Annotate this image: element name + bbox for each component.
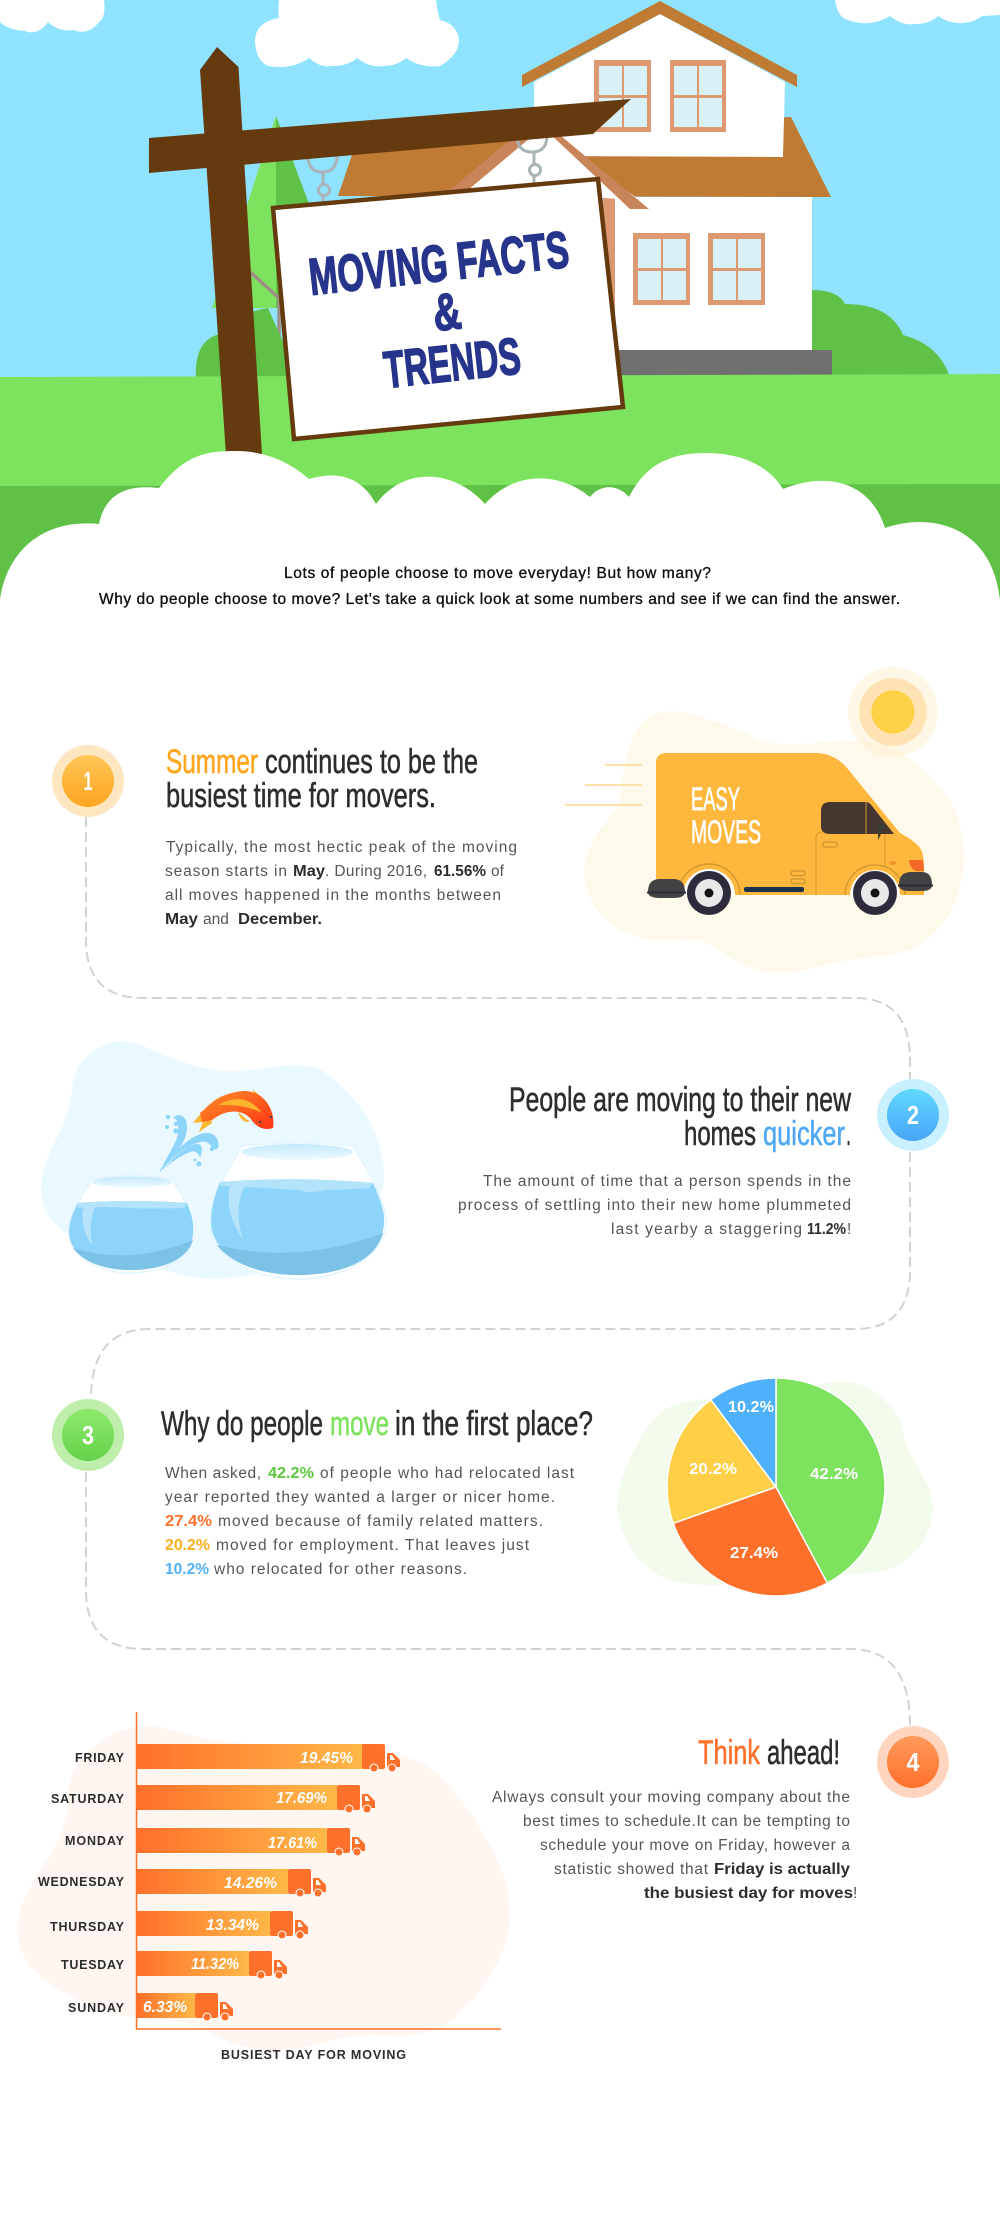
illustration: blob xyxy=(41,1041,384,1279)
chart blob xyxy=(17,1726,510,2051)
hook: left chain xyxy=(308,155,337,204)
gable beams xyxy=(450,132,649,209)
number badge 4 xyxy=(877,1726,949,1798)
cloud: top right xyxy=(835,0,1000,24)
chart caption: BUSIEST DAY FOR MOVING xyxy=(221,2048,406,2062)
van label: EASY xyxy=(691,781,740,817)
intro text xyxy=(99,565,900,608)
body text 2: ! xyxy=(847,1221,851,1238)
body text 1: all moves happened in the months between xyxy=(165,887,501,904)
number badge 4: 4 xyxy=(906,1747,920,1777)
bar: monday xyxy=(65,1828,365,1856)
pie labels: 42.2% xyxy=(810,1466,858,1483)
heading 3: Why do people xyxy=(161,1405,323,1443)
heading 2: . xyxy=(846,1115,851,1153)
foundation xyxy=(600,350,832,376)
bar: thursday: THURSDAY xyxy=(50,1920,125,1934)
heading 1 xyxy=(166,743,478,815)
heading 3 xyxy=(161,1405,593,1443)
title: MOVING FACTS xyxy=(306,221,572,307)
body text 4: statistic showed that xyxy=(554,1861,709,1878)
dashed connector xyxy=(86,817,910,1725)
bar: tuesday: TUESDAY xyxy=(61,1958,125,1972)
bar: saturday: 17.69% xyxy=(276,1790,327,1807)
bar: sunday xyxy=(68,1993,233,2021)
bar: sunday: SUNDAY xyxy=(68,2001,125,2015)
porch column xyxy=(603,192,615,352)
lawn xyxy=(0,374,1000,640)
title: TRENDS xyxy=(381,327,523,400)
dark lawn xyxy=(0,484,1000,640)
axes xyxy=(136,1712,501,2029)
bar: sunday: 6.33% xyxy=(143,1999,187,2016)
body text 3 xyxy=(165,1465,575,1578)
window: upper left xyxy=(594,60,651,132)
body text 4: ! xyxy=(853,1885,857,1902)
pie labels: 27.4% xyxy=(730,1545,778,1562)
heading 2: People are moving to their new xyxy=(509,1081,851,1119)
bar: tuesday xyxy=(61,1951,287,1979)
pie labels: 10.2% xyxy=(728,1399,774,1416)
bar: wednesday xyxy=(38,1869,326,1897)
window: upper right xyxy=(670,60,726,132)
body text 4: best times to schedule.It can be tempting to xyxy=(523,1813,850,1830)
number badge 2 xyxy=(877,1079,949,1151)
body text 1: and xyxy=(203,911,229,928)
body text 3: moved for employment. That leaves just xyxy=(216,1537,530,1554)
body text 2 xyxy=(458,1173,851,1238)
bar: thursday: 13.34% xyxy=(206,1917,259,1934)
heading 2: quicker xyxy=(763,1115,845,1153)
front bumper xyxy=(898,872,933,891)
body text 3: year reported they wanted a larger or nicer home. xyxy=(165,1489,555,1506)
bar: thursday xyxy=(50,1911,308,1939)
body text 4 xyxy=(492,1789,857,1902)
window: lower left xyxy=(633,233,690,305)
speed lines xyxy=(565,765,642,805)
heading 1: continues to be the xyxy=(265,743,478,781)
intro text: Lots of people choose to move everyday! But how many? xyxy=(284,565,711,582)
sign post xyxy=(200,47,262,480)
bar: monday: MONDAY xyxy=(65,1834,125,1848)
pie labels xyxy=(689,1399,858,1562)
number badge 3: 3 xyxy=(82,1420,94,1450)
body text 1: 61.56% xyxy=(434,863,486,880)
van label xyxy=(691,781,761,850)
van label: MOVES xyxy=(691,814,761,850)
title sign board xyxy=(273,179,623,439)
bar: friday: 19.45% xyxy=(300,1750,353,1767)
section 1 xyxy=(52,667,964,973)
body text 1: May xyxy=(165,911,198,928)
gable xyxy=(450,128,640,200)
body text 1: May xyxy=(293,863,325,880)
heading 4: ahead! xyxy=(767,1734,840,1772)
wheels xyxy=(687,871,897,915)
section 3 xyxy=(52,1378,933,1596)
heading 1: busiest time for movers. xyxy=(166,777,436,815)
body text 1: of xyxy=(491,863,505,880)
body text 4: Friday is actually xyxy=(714,1861,850,1878)
large fishbowl xyxy=(210,1143,386,1279)
heading 2: homes xyxy=(684,1115,756,1153)
hero illustration xyxy=(0,0,1000,640)
bar: saturday: SATURDAY xyxy=(51,1792,125,1806)
bar chart xyxy=(38,1712,501,2029)
heading 2 xyxy=(509,1081,851,1153)
tree xyxy=(212,116,330,375)
body text 1: season starts in xyxy=(165,863,287,880)
body text 2: 11.2% xyxy=(807,1221,846,1238)
body text 4: Always consult your moving company about the xyxy=(492,1789,850,1806)
heading 1: Summer xyxy=(166,743,258,781)
bushes xyxy=(196,290,950,380)
bar: wednesday: WEDNESDAY xyxy=(38,1875,125,1889)
bar: wednesday: 14.26% xyxy=(224,1875,277,1892)
cloud: top middle xyxy=(255,0,459,67)
number badge 1 xyxy=(52,745,124,817)
body text 3: moved because of family related matters. xyxy=(218,1513,543,1530)
heading 3: move xyxy=(330,1405,389,1443)
body text 1: . During 2016, xyxy=(325,863,427,880)
small fishbowl xyxy=(69,1176,193,1273)
body text 3: 20.2% xyxy=(165,1537,210,1554)
bar: monday: 17.61% xyxy=(268,1835,317,1852)
goldfish xyxy=(193,1089,273,1132)
body text 1 xyxy=(165,839,517,928)
body text 4: the busiest day for moves xyxy=(644,1885,853,1902)
body text 2: last yearby a staggering xyxy=(611,1221,802,1238)
heading 3: in the first place? xyxy=(395,1405,593,1443)
body text 3: 10.2% xyxy=(165,1561,209,1578)
body text 1: Typically, the most hectic peak of the moving xyxy=(166,839,517,856)
number badge 1: 1 xyxy=(84,766,92,796)
title: & xyxy=(430,282,464,343)
window: lower right xyxy=(708,233,765,305)
pie chart xyxy=(667,1378,885,1596)
pie labels: 20.2% xyxy=(689,1461,737,1478)
lower wall xyxy=(610,197,812,350)
intro text: Why do people choose to move? Let's take a quick look at some numbers and see if we can find the answer. xyxy=(99,591,900,608)
water splash xyxy=(159,1115,218,1173)
icon: sun xyxy=(848,667,938,757)
bar: tuesday: 11.32% xyxy=(191,1956,239,1973)
illustration: blob xyxy=(584,711,964,973)
rear bumper xyxy=(647,879,686,898)
sign crossbar xyxy=(149,99,631,173)
upper roof xyxy=(522,1,797,87)
lower roof xyxy=(338,117,831,197)
body text 1: December. xyxy=(238,911,322,928)
section 2 xyxy=(41,1041,949,1279)
bar: friday xyxy=(75,1744,400,1772)
number badge 3 xyxy=(52,1399,124,1471)
body text 4: schedule your move on Friday, however a xyxy=(540,1837,850,1854)
title xyxy=(306,221,572,400)
house xyxy=(338,1,832,376)
body text 3: 42.2% xyxy=(268,1465,314,1482)
number badge 2: 2 xyxy=(907,1100,919,1130)
body text 3: who relocated for other reasons. xyxy=(213,1561,467,1578)
upper wall xyxy=(534,14,785,157)
body text 3: 27.4% xyxy=(165,1513,212,1530)
section 4 xyxy=(17,1712,949,2062)
body text 2: process of settling into their new home plummeted xyxy=(458,1197,851,1214)
heading 4: Think xyxy=(698,1734,761,1772)
cloud: white divider xyxy=(0,451,1000,640)
cloud: top left xyxy=(0,0,104,32)
illustration: blob xyxy=(617,1382,933,1585)
bar: friday: FRIDAY xyxy=(75,1751,125,1765)
body text 3: When asked, xyxy=(165,1465,261,1482)
body text 3: of people who had relocated last xyxy=(320,1465,575,1482)
heading 4 xyxy=(698,1734,840,1772)
body text 2: The amount of time that a person spends in the xyxy=(483,1173,851,1190)
moving van xyxy=(647,753,933,915)
hook: right chain xyxy=(517,135,547,184)
bar: saturday xyxy=(51,1785,375,1813)
